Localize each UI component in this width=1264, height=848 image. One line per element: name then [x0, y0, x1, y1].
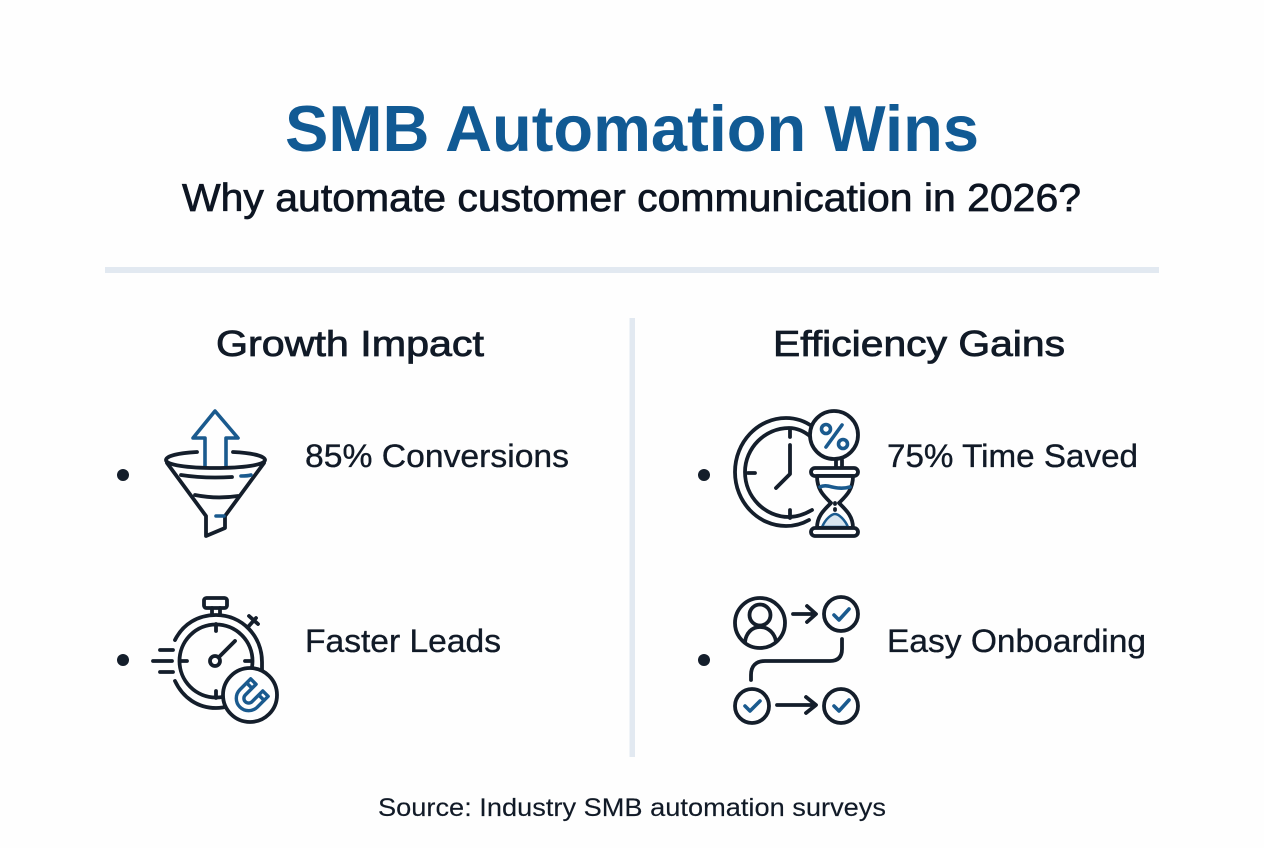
bullet: leads: [117, 654, 129, 666]
panel: efficiency gains: [698, 323, 1146, 723]
bullet: time saved: [698, 469, 710, 481]
item: easy onboarding: Easy Onboarding: [887, 623, 1146, 659]
panel: growth impact: [117, 323, 569, 722]
stat: 85% conversions: 85% Conversions: [305, 438, 569, 474]
bullet: conversions: [117, 469, 129, 481]
bullet: onboarding: [698, 654, 710, 666]
heading: growth impact: Growth Impact: [216, 323, 484, 364]
icon: funnel with up arrow: [166, 411, 265, 536]
icon: stopwatch with magnet: [153, 598, 277, 722]
subtitle: Why automate customer communication in 2026?: [182, 177, 1081, 220]
icon: onboarding workflow: [735, 597, 858, 723]
stat: 75% time saved: 75% Time Saved: [887, 438, 1138, 474]
icon: clock with hourglass: [735, 411, 858, 536]
item: faster leads: Faster Leads: [305, 623, 501, 659]
heading: efficiency gains: Efficiency Gains: [773, 323, 1065, 364]
source note: Source: Industry SMB automation surveys: [378, 794, 886, 822]
title: SMB Automation Wins: [285, 92, 979, 165]
